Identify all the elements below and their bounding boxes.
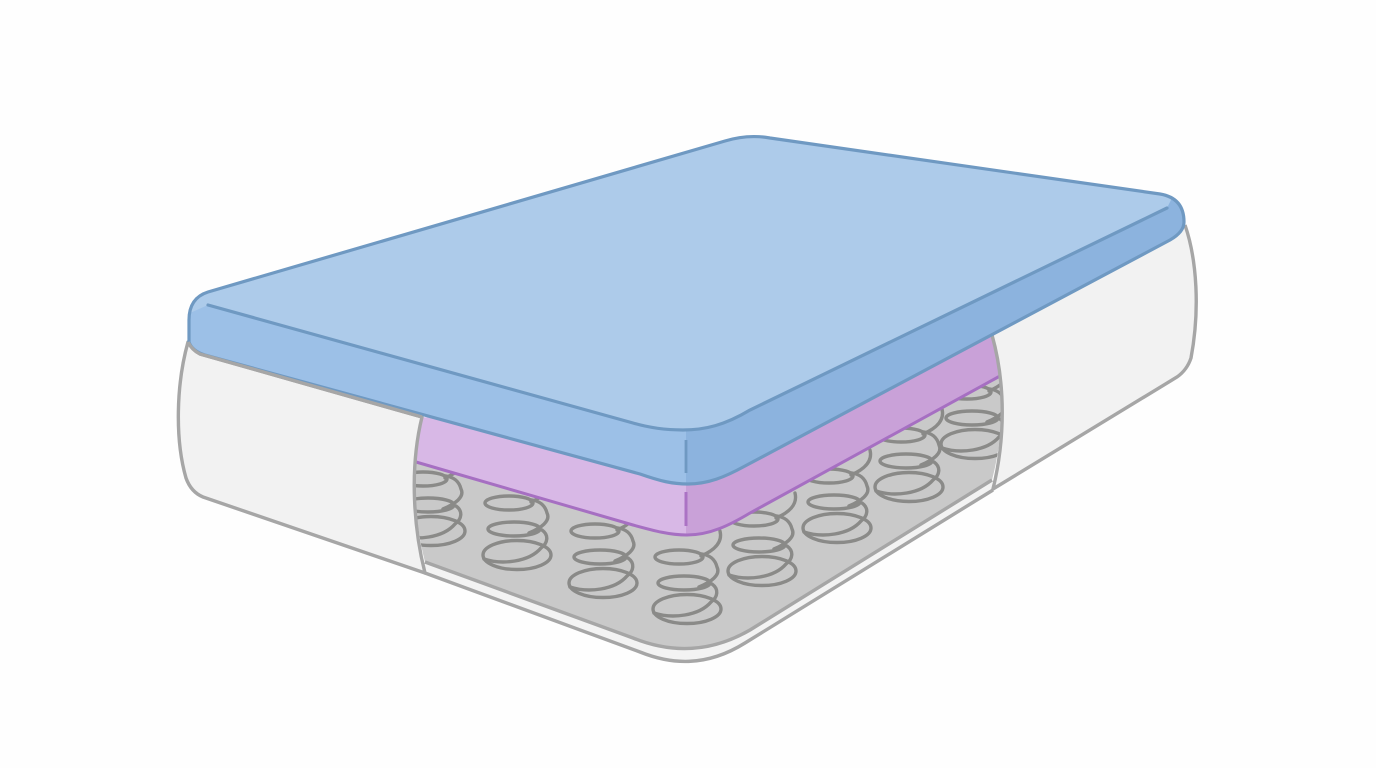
panel: left side cover (178, 342, 425, 573)
layer: blue topper (189, 137, 1184, 484)
illustration: mattress cutaway (176, 135, 1198, 664)
blue topper corner dash (685, 440, 687, 473)
panel: right side cover (992, 225, 1196, 489)
blue topper top surface (190, 137, 1172, 430)
panel: spring core base (415, 376, 1002, 649)
springs: coil row (416, 384, 1000, 626)
panel: bottom cover strip (425, 470, 993, 661)
blue topper right front face (686, 196, 1184, 484)
blue topper outline (189, 137, 1184, 484)
blue topper top seam (208, 208, 1167, 430)
cover edge: line where left cover meets topper (188, 342, 422, 417)
layer: lavender comfort foam (416, 335, 1000, 535)
blue topper left front face (189, 292, 686, 484)
